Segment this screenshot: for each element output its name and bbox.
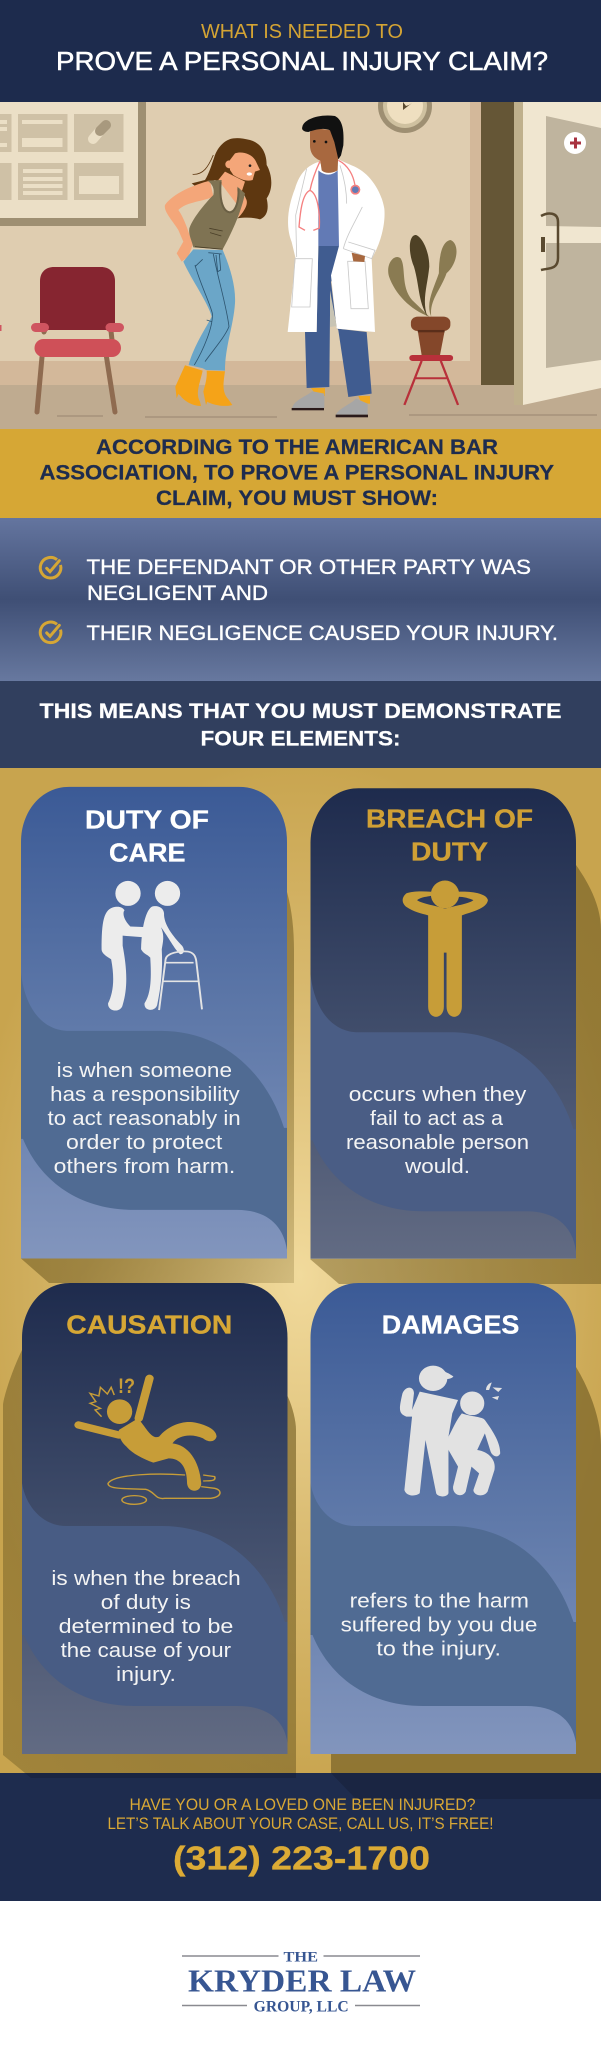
card body: breach of duty: would. (404, 1155, 470, 1178)
card body: causation: is when the breach (51, 1567, 241, 1590)
logo: the kryder law group: GROUP, LLC (254, 1998, 349, 2015)
footer band (0, 1773, 601, 1901)
card title: breach of duty: DUTY (411, 836, 488, 866)
potted plant (388, 235, 458, 405)
card body: causation: determined to be (59, 1615, 233, 1638)
call to action: LET’S TALK ABOUT YOUR CASE, CALL US, IT’S FREE! (108, 1814, 494, 1833)
intro text: ASSOCIATION, TO PROVE A PERSONAL INJURY (40, 462, 554, 484)
four elements heading band (0, 681, 601, 768)
card: causation (22, 1283, 288, 1754)
card body: damages: suffered by you due (341, 1613, 537, 1636)
card body: breach of duty (346, 1083, 529, 1178)
phone number: (312) 223-1700 (173, 1840, 430, 1876)
card body: duty of care: has a responsibility (50, 1083, 240, 1106)
card body: causation: of duty is (101, 1591, 191, 1614)
intro text: CLAIM, YOU MUST SHOW: (156, 487, 438, 510)
icon: person slipping on a puddle (79, 1375, 220, 1504)
card title: duty of care: CARE (109, 837, 186, 867)
icon: person with hands behind head (403, 881, 488, 1017)
logo: the kryder law group: KRYDER LAW (188, 1963, 416, 1999)
icon: check 1 (40, 557, 61, 578)
checklist item 2: THEIR NEGLIGENCE CAUSED YOUR INJURY. (86, 622, 558, 645)
notice board (0, 102, 146, 226)
card body: duty of care: to act reasonably in (48, 1107, 241, 1130)
logo: the kryder law group (182, 1950, 420, 2015)
intro text (40, 436, 554, 510)
woman holding back (165, 138, 271, 406)
heading text: FOUR ELEMENTS: (200, 726, 400, 750)
card body: damages (341, 1589, 537, 1660)
icon: worker helping injured person (400, 1366, 502, 1496)
heading text (40, 699, 562, 750)
card body: duty of care: others from harm. (54, 1155, 235, 1178)
shadow: card 3 (3, 1350, 296, 1773)
card body: causation (51, 1567, 241, 1686)
card title: breach of duty (366, 804, 533, 866)
intro text: ACCORDING TO THE AMERICAN BAR (96, 436, 498, 459)
card: duty of care (21, 787, 287, 1258)
card body: breach of duty: reasonable person (346, 1131, 529, 1154)
card body: causation: injury. (116, 1663, 176, 1686)
wall clock (378, 102, 432, 133)
card title: causation: CAUSATION (66, 1309, 232, 1339)
heading text: THIS MEANS THAT YOU MUST DEMONSTRATE (40, 699, 562, 723)
card body: breach of duty: occurs when they (349, 1083, 527, 1106)
card: breach of duty (310, 788, 576, 1259)
checklist panel (0, 518, 601, 681)
shadow: card 2 (310, 865, 601, 1284)
card title: duty of care: DUTY OF (85, 804, 209, 834)
doctor (288, 116, 385, 417)
call to action (108, 1795, 494, 1833)
card body: causation: the cause of your (61, 1639, 231, 1662)
card title: duty of care (85, 804, 209, 867)
chair (0, 267, 124, 412)
header band (0, 0, 601, 102)
icon: check 2 (40, 622, 61, 643)
icon: helper and person with walker (102, 881, 202, 1011)
shadow: card 1 (21, 892, 294, 1283)
card body: duty of care: is when someone (57, 1059, 232, 1082)
checklist item 1: THE DEFENDANT OR OTHER PARTY WAS (86, 556, 531, 579)
header kicker: WHAT IS NEEDED TO (201, 21, 403, 43)
logo: the kryder law group: THE (284, 1950, 318, 1966)
card: damages (310, 1283, 576, 1754)
elements background (0, 768, 601, 1773)
main title: PROVE A PERSONAL INJURY CLAIM? (56, 48, 548, 76)
card title: breach of duty: BREACH OF (366, 804, 533, 834)
checklist item 1: NEGLIGENT AND (87, 582, 268, 605)
card body: duty of care: order to protect (66, 1131, 223, 1154)
card body: duty of care (48, 1059, 241, 1178)
door (481, 102, 601, 405)
gold intro band (0, 429, 601, 518)
card body: damages: to the injury. (376, 1637, 501, 1660)
call to action: HAVE YOU OR A LOVED ONE BEEN INJURED? (130, 1795, 476, 1814)
checklist item 1 (86, 556, 531, 605)
exclamation marks: !? (118, 1375, 135, 1398)
shadow: card 4 (331, 1367, 601, 1773)
illustration: doctor's office (0, 79, 601, 429)
card title: damages: DAMAGES (382, 1309, 519, 1339)
card body: breach of duty: fail to act as a (370, 1107, 504, 1130)
card body: damages: refers to the harm (350, 1589, 529, 1612)
